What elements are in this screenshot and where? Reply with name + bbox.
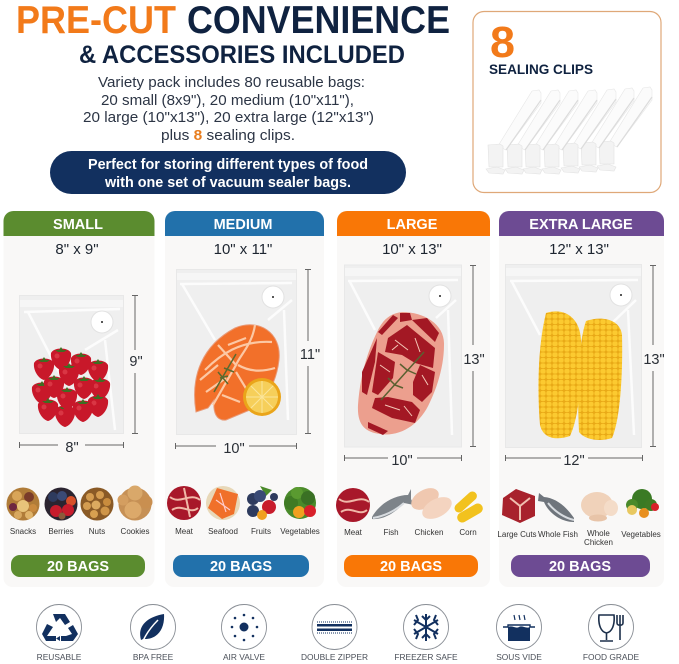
- bag count: [511, 555, 650, 577]
- meat: Meat: [175, 527, 194, 536]
- chicken: [408, 484, 455, 537]
- number 8: 8: [490, 18, 515, 67]
- food icons: [6, 486, 152, 536]
- meat: [167, 486, 201, 536]
- feature: freezer safe: [394, 604, 458, 662]
- title: CONVENIENCE: [187, 0, 450, 42]
- description text: Variety pack includes 80 reusable bags:: [98, 74, 365, 91]
- vegetables: Vegetables: [621, 530, 661, 539]
- callout pill: Perfect for storing different types of food: [88, 156, 368, 173]
- bag count: [173, 555, 309, 577]
- feature: food grade: FOOD GRADE: [583, 652, 640, 662]
- size label: 12" x 13": [549, 241, 609, 258]
- title: PRE-CUT: [16, 0, 176, 42]
- dimension: width: [506, 453, 642, 469]
- header: extra large: [499, 211, 664, 236]
- whole chicken: [581, 492, 618, 547]
- size label: 10" x 13": [382, 241, 442, 258]
- header: extra large: EXTRA LARGE: [529, 217, 633, 233]
- size label: 10" x 11": [214, 241, 272, 258]
- food icons: [336, 484, 485, 537]
- vegetables: [280, 487, 320, 536]
- feature: bpa free: [130, 604, 176, 662]
- description text: [83, 74, 374, 144]
- dimension: height: 13": [643, 352, 665, 368]
- chicken: Chicken: [415, 528, 443, 537]
- panel: small: [4, 211, 154, 587]
- bag count: 20 BAGS: [549, 559, 611, 575]
- dimension: width: 12": [563, 453, 585, 469]
- fruits: [247, 486, 278, 536]
- panel: extra large: [497, 211, 665, 587]
- feature: air valve: [222, 604, 266, 662]
- dimension: height: [463, 266, 485, 446]
- whole fish: Whole Fish: [538, 530, 578, 539]
- dimension: width: [344, 453, 462, 469]
- dimension: height: [129, 296, 143, 434]
- dimension: height: 13": [463, 352, 485, 368]
- dimension: width: 10": [391, 453, 413, 469]
- header: medium: MEDIUM: [214, 217, 272, 233]
- nuts: [80, 488, 114, 536]
- panel: medium: [165, 211, 324, 587]
- dimension: width: [176, 441, 296, 457]
- bag count: [344, 555, 478, 577]
- subtitle: & ACCESSORIES INCLUDED: [79, 41, 405, 69]
- feature: freezer safe: FREEZER SAFE: [394, 652, 458, 662]
- seafood: [206, 486, 240, 536]
- feature: sous vide: [496, 604, 542, 662]
- snacks: Snacks: [10, 527, 36, 536]
- header: large: [337, 211, 490, 236]
- bag count: [11, 555, 145, 577]
- bag with corn: [506, 264, 642, 448]
- dimension: width: 10": [223, 441, 245, 457]
- feature: bpa free: BPA FREE: [133, 652, 174, 662]
- seafood: Seafood: [208, 527, 238, 536]
- feature: reusable: [36, 604, 82, 662]
- cookies: Cookies: [121, 527, 149, 536]
- bag with salmon: [176, 270, 296, 434]
- snacks: [6, 488, 40, 536]
- callout pill: with one set of vacuum sealer bags.: [104, 174, 351, 191]
- title: [16, 0, 450, 42]
- feature: sous vide: SOUS VIDE: [496, 652, 542, 662]
- whole fish: [538, 493, 578, 539]
- feature: double zipper: [301, 604, 368, 662]
- corn: [453, 490, 485, 537]
- feature: double zipper: DOUBLE ZIPPER: [301, 652, 368, 662]
- dimension: height: [300, 270, 320, 434]
- description text: 20 small (8x9"), 20 medium (10"x11"),: [101, 92, 354, 109]
- meat: [336, 488, 370, 537]
- dimension: height: [643, 266, 665, 446]
- fish: Fish: [383, 528, 399, 537]
- sealing clips label: SEALING CLIPS: [489, 62, 593, 77]
- large cuts: [497, 489, 537, 539]
- dimension: height: 9": [129, 354, 143, 370]
- whole chicken: Chicken: [584, 538, 613, 547]
- nuts: Nuts: [89, 527, 105, 536]
- berries: [44, 488, 78, 536]
- berries: Berries: [48, 527, 74, 536]
- meat: Meat: [344, 528, 363, 537]
- feature: reusable: REUSABLE: [37, 652, 82, 662]
- header: small: SMALL: [53, 217, 103, 233]
- description text: plus 8 sealing clips.: [161, 127, 295, 144]
- dimension: width: 8": [65, 440, 79, 456]
- description text: 20 large (10"x13"), 20 extra large (12"x13"): [83, 109, 374, 126]
- bag with steak: [344, 265, 462, 447]
- feature: food grade: [583, 604, 640, 662]
- callout pill: [50, 151, 406, 194]
- bag count: 20 BAGS: [210, 559, 272, 575]
- dimension: width: [20, 440, 124, 456]
- clips illustration: [486, 87, 652, 174]
- panel: large: [336, 211, 490, 587]
- cookies: [118, 486, 152, 536]
- vegetables: Vegetables: [280, 527, 320, 536]
- panel: sealing clips: [473, 12, 661, 192]
- header: small: [4, 211, 154, 236]
- header: medium: [165, 211, 324, 236]
- header: large: LARGE: [387, 217, 438, 233]
- bag count: 20 BAGS: [380, 559, 442, 575]
- whole chicken: Whole: [587, 529, 610, 538]
- fish: [372, 489, 414, 537]
- fruits: Fruits: [251, 527, 271, 536]
- dimension: height: 11": [300, 347, 320, 363]
- large cuts: Large Cuts: [497, 530, 537, 539]
- corn: Corn: [459, 528, 477, 537]
- food icons: [167, 486, 320, 536]
- vegetables: [621, 489, 661, 539]
- food icons: [497, 489, 661, 547]
- size label: 8" x 9": [55, 241, 99, 258]
- feature: air valve: AIR VALVE: [223, 652, 265, 662]
- bag count: 20 BAGS: [47, 559, 109, 575]
- bag with strawberries: [20, 296, 124, 434]
